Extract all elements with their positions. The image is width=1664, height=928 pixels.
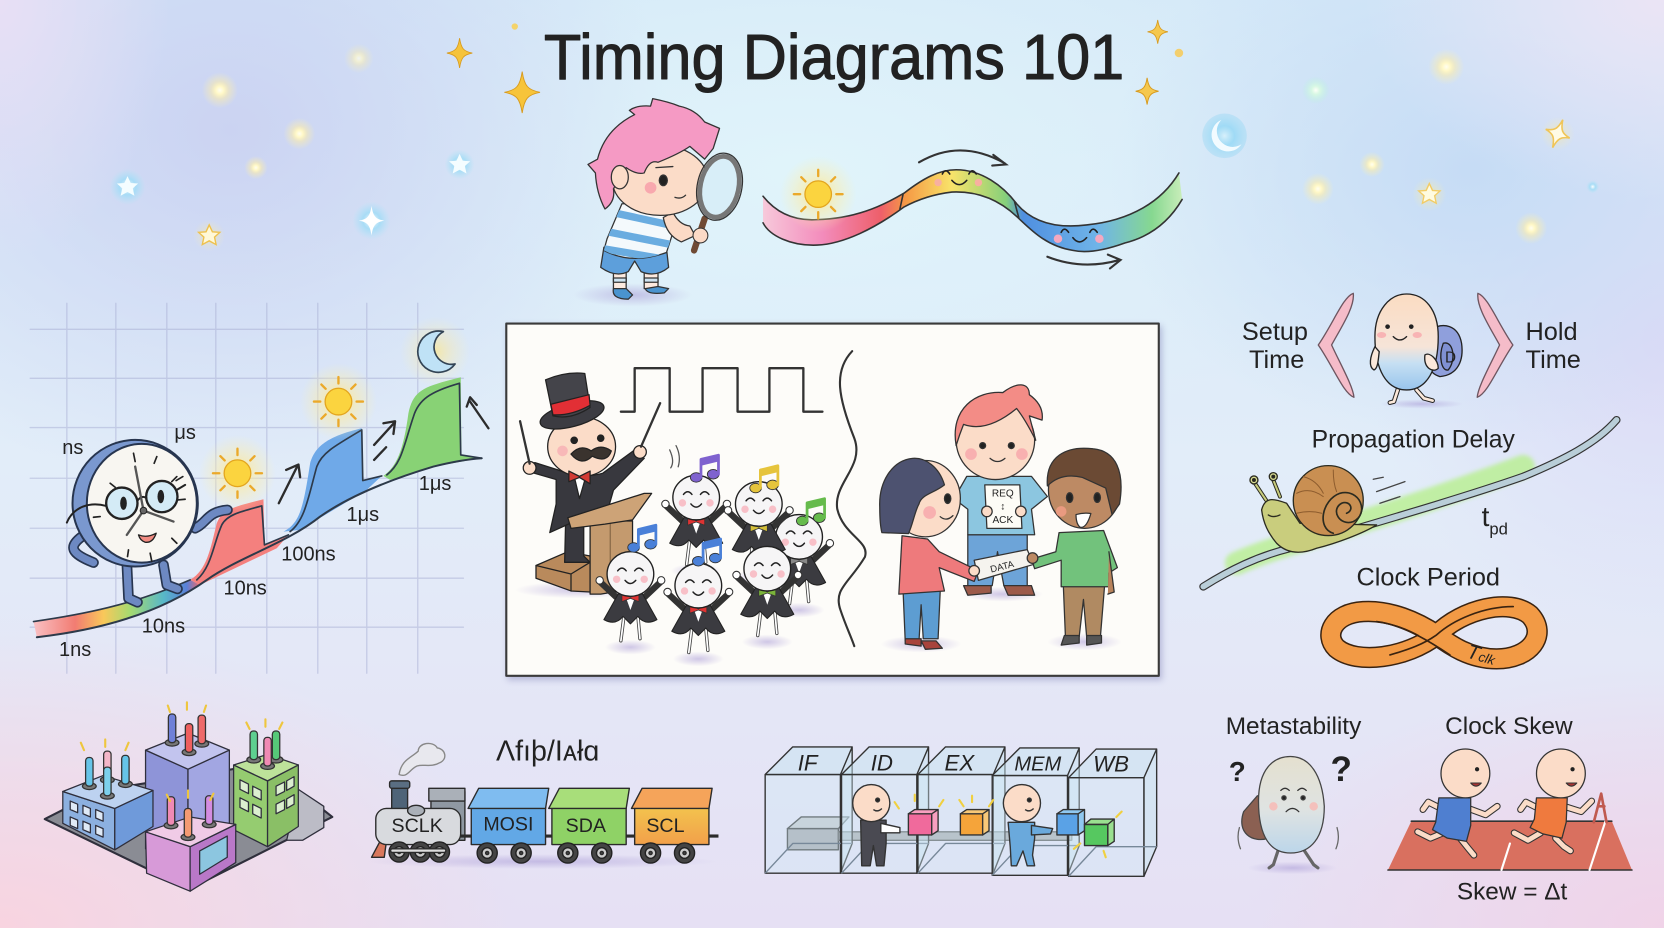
red pulse (190, 499, 288, 585)
blue pulse (283, 428, 382, 532)
MOSI car (468, 788, 549, 863)
WB stage (1069, 749, 1157, 876)
panel: clock skew (1388, 713, 1632, 906)
music notes (628, 455, 825, 566)
frame (506, 324, 1159, 676)
skew formula: Skew = Δt (1457, 879, 1568, 906)
MOSI car: MOSI (483, 814, 533, 836)
worker two (1003, 785, 1053, 866)
pulse outlines (197, 383, 482, 580)
panel: isometric chip city (45, 702, 332, 891)
IF stage (765, 747, 852, 873)
garbled bus label: Λfıþ/Iᴀłɑ (496, 736, 599, 768)
smiling faces (934, 171, 1104, 243)
grey block (287, 789, 324, 840)
clock character (67, 440, 227, 602)
wave ribbon (763, 170, 1182, 252)
panel: setup and hold time (1203, 293, 1617, 670)
setup label: Time (1249, 346, 1304, 374)
magnifying glass (691, 149, 748, 250)
child with brown hair receiving scroll (1031, 448, 1122, 650)
clock skew label: Clock Skew (1445, 713, 1573, 740)
singers (596, 475, 834, 666)
SCL car: SCL (646, 815, 685, 837)
right bracket (1477, 293, 1513, 397)
suns and moon (199, 435, 276, 512)
track (1388, 821, 1632, 870)
hold label: Time (1526, 346, 1581, 374)
upper motion arrow (919, 150, 1006, 166)
SCL car (631, 788, 718, 863)
child with request and acknowledge sheet (954, 385, 1047, 602)
data bit character: D (1445, 350, 1456, 367)
panel: metastability (1226, 713, 1362, 874)
EX stage (918, 747, 1005, 873)
character: child with magnifying glass (573, 99, 748, 307)
arrows (279, 397, 488, 503)
clock period label: Clock Period (1356, 564, 1500, 592)
clock waveform (621, 368, 822, 412)
signal wire with glow (1203, 420, 1617, 587)
panel: conductor and handshake comparison (506, 324, 1159, 676)
panel: metastability: ? (1331, 750, 1352, 789)
ground (45, 764, 332, 889)
lower motion arrow (1047, 255, 1121, 268)
scroll: DATA (989, 559, 1016, 576)
child with request and acknowledge sheet: ACK (992, 515, 1013, 526)
SDA car (549, 788, 629, 863)
child head and pink hair (588, 99, 720, 215)
green pulse (383, 377, 480, 480)
runner in orange (1514, 749, 1592, 851)
IF stage: IF (798, 750, 819, 775)
road line (37, 458, 482, 637)
data bit character (1370, 294, 1463, 409)
conductor (515, 373, 679, 598)
purple tower (146, 733, 229, 849)
panel: bus train (366, 736, 718, 869)
sun on wave (780, 156, 856, 232)
divider (837, 351, 866, 646)
spark marks (895, 795, 1122, 857)
worker one (853, 785, 900, 866)
signal pillars (82, 714, 283, 841)
child with request and acknowledge sheet: ↕ (1000, 501, 1005, 512)
green tower (234, 754, 298, 847)
wobbling bean character (1238, 756, 1338, 874)
EX stage: EX (944, 750, 975, 775)
scale labels: 1ns (59, 639, 91, 661)
MEM stage (992, 748, 1079, 875)
MEM stage: MEM (1014, 753, 1062, 775)
t_pd label: pd (1489, 519, 1508, 538)
T clk label: Tclk (1465, 641, 1499, 670)
metastability label: Metastability (1226, 713, 1362, 740)
hold label: Hold (1526, 318, 1578, 346)
pink building (146, 817, 236, 891)
steam (399, 743, 445, 775)
runner in blue (1418, 749, 1497, 855)
t_pd label: t (1482, 501, 1489, 532)
hurdle (1594, 794, 1607, 822)
scale labels: 1μs (346, 504, 379, 526)
SDA car: SDA (566, 815, 607, 837)
scale labels: 10ns (142, 616, 185, 638)
scale labels (59, 422, 451, 661)
question marks: ? (1229, 756, 1246, 787)
mobius loop (1331, 607, 1537, 670)
setup label: Setup (1242, 318, 1308, 346)
scale labels: μs (174, 422, 196, 444)
decorative stars and glows (109, 20, 1599, 251)
locomotive (372, 781, 465, 862)
grid (30, 303, 463, 673)
scale labels: 100ns (281, 544, 336, 566)
WB stage: WB (1093, 751, 1129, 776)
child body (601, 204, 695, 299)
child with dark hair handing over scroll (880, 458, 978, 652)
panel: logarithmic time scale (30, 303, 488, 673)
scale labels: 1μs (419, 473, 451, 495)
child with request and acknowledge sheet: REQ (992, 489, 1014, 500)
title: Timing Diagrams 101 (544, 22, 1124, 93)
locomotive: SCLK (392, 815, 443, 837)
snail (1250, 466, 1405, 552)
conveyor (787, 817, 1072, 850)
scroll (969, 550, 1038, 580)
ID stage: ID (871, 750, 893, 775)
scale labels: ns (62, 437, 83, 459)
spark marks (81, 702, 282, 801)
ID stage (842, 747, 929, 873)
panel: pipeline stages (765, 747, 1157, 876)
data cubes (908, 810, 1114, 846)
left bracket (1318, 293, 1354, 397)
scale labels: 10ns (223, 578, 267, 600)
rainbow signal wave with sun and arrows (763, 150, 1182, 268)
propagation delay label: Propagation Delay (1312, 425, 1515, 453)
rainbow road (34, 580, 200, 637)
blue building (63, 776, 153, 850)
